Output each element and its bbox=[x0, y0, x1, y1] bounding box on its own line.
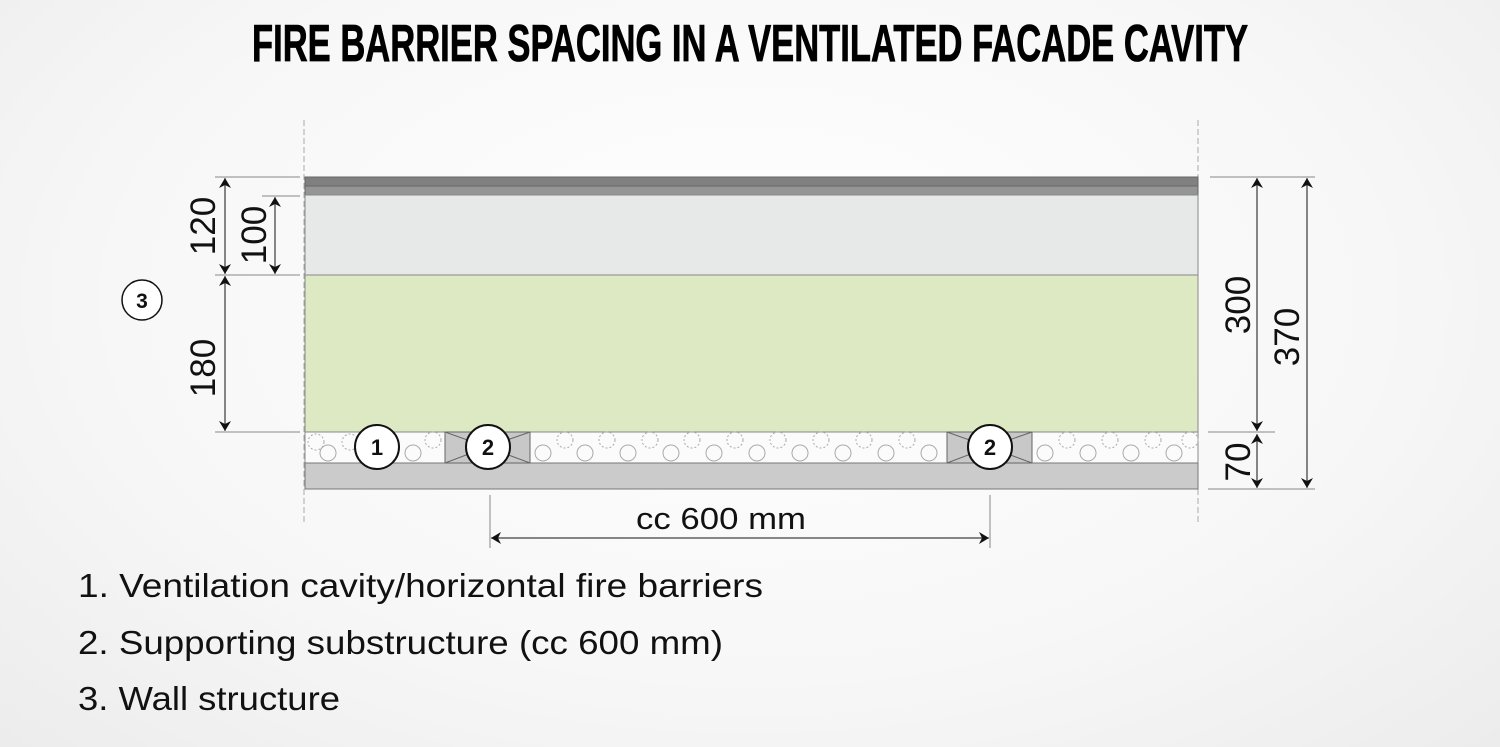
substructure 1 bbox=[445, 432, 530, 463]
substructure 2 bbox=[947, 432, 1032, 463]
layer: ventilation cavity bbox=[305, 432, 1198, 463]
marker 3 bbox=[122, 280, 162, 320]
layer: board bbox=[305, 195, 1198, 275]
marker 1 bbox=[355, 425, 399, 469]
wall section diagram bbox=[304, 120, 1198, 525]
layer: wall bbox=[305, 463, 1198, 489]
legend bbox=[78, 567, 763, 717]
marker 2 left: 2 bbox=[482, 435, 494, 460]
legend: 3. Wall structure bbox=[78, 680, 340, 717]
left dimensions: 100 bbox=[235, 206, 274, 264]
left dimensions: 180 bbox=[184, 339, 223, 397]
right dimensions: 300 bbox=[1219, 276, 1258, 334]
marker 2 right bbox=[968, 425, 1012, 469]
marker 2 left bbox=[466, 425, 510, 469]
right dimensions bbox=[1208, 177, 1315, 489]
left dimensions: 120 bbox=[184, 197, 223, 255]
legend: 1. Ventilation cavity/horizontal fire barriers bbox=[78, 567, 763, 604]
marker 2 right: 2 bbox=[984, 435, 996, 460]
layer: cladding bbox=[305, 177, 1198, 195]
marker 1: 1 bbox=[371, 435, 383, 460]
left dimensions bbox=[184, 177, 300, 432]
layer: insulation bbox=[305, 275, 1198, 432]
marker 3: 3 bbox=[136, 290, 148, 313]
spacing dimension cc 600 mm: cc 600 mm bbox=[636, 501, 806, 536]
legend: 2. Supporting substructure (cc 600 mm) bbox=[78, 624, 723, 661]
right dimensions: 370 bbox=[1268, 308, 1307, 366]
right dimensions: 70 bbox=[1219, 443, 1258, 481]
